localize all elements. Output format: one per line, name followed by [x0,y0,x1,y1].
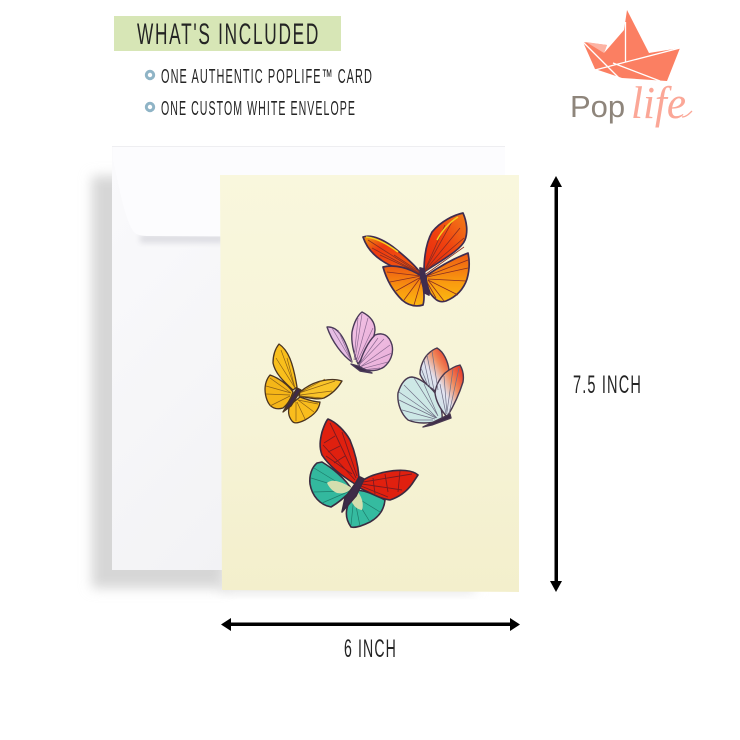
envelope: white with flap [92,146,505,592]
heading: what's included [114,16,341,51]
butterfly: yellow [265,344,342,423]
logo: poplife paper boat: Pop [570,89,625,124]
butterfly: orange [363,213,469,306]
butterfly: red and teal [310,419,418,527]
logo: poplife paper boat [570,10,692,128]
list: included items [146,66,373,120]
arrow: height [550,176,562,592]
label: 7.5 inch: 7.5 INCH [573,371,642,399]
arrow: width [221,618,520,631]
card: cream greeting card [220,175,519,592]
label: 6 inch: 6 INCH [344,635,397,663]
butterfly: white, orange and teal [398,348,463,427]
list: included items: ONE AUTHENTIC POPLIFE™ CARD [161,66,373,88]
butterfly: pink [327,312,393,373]
logo: poplife paper boat: life [631,77,686,128]
list: included items: ONE CUSTOM WHITE ENVELOPE [161,98,356,120]
heading: what's included: WHAT'S INCLUDED [137,18,320,51]
